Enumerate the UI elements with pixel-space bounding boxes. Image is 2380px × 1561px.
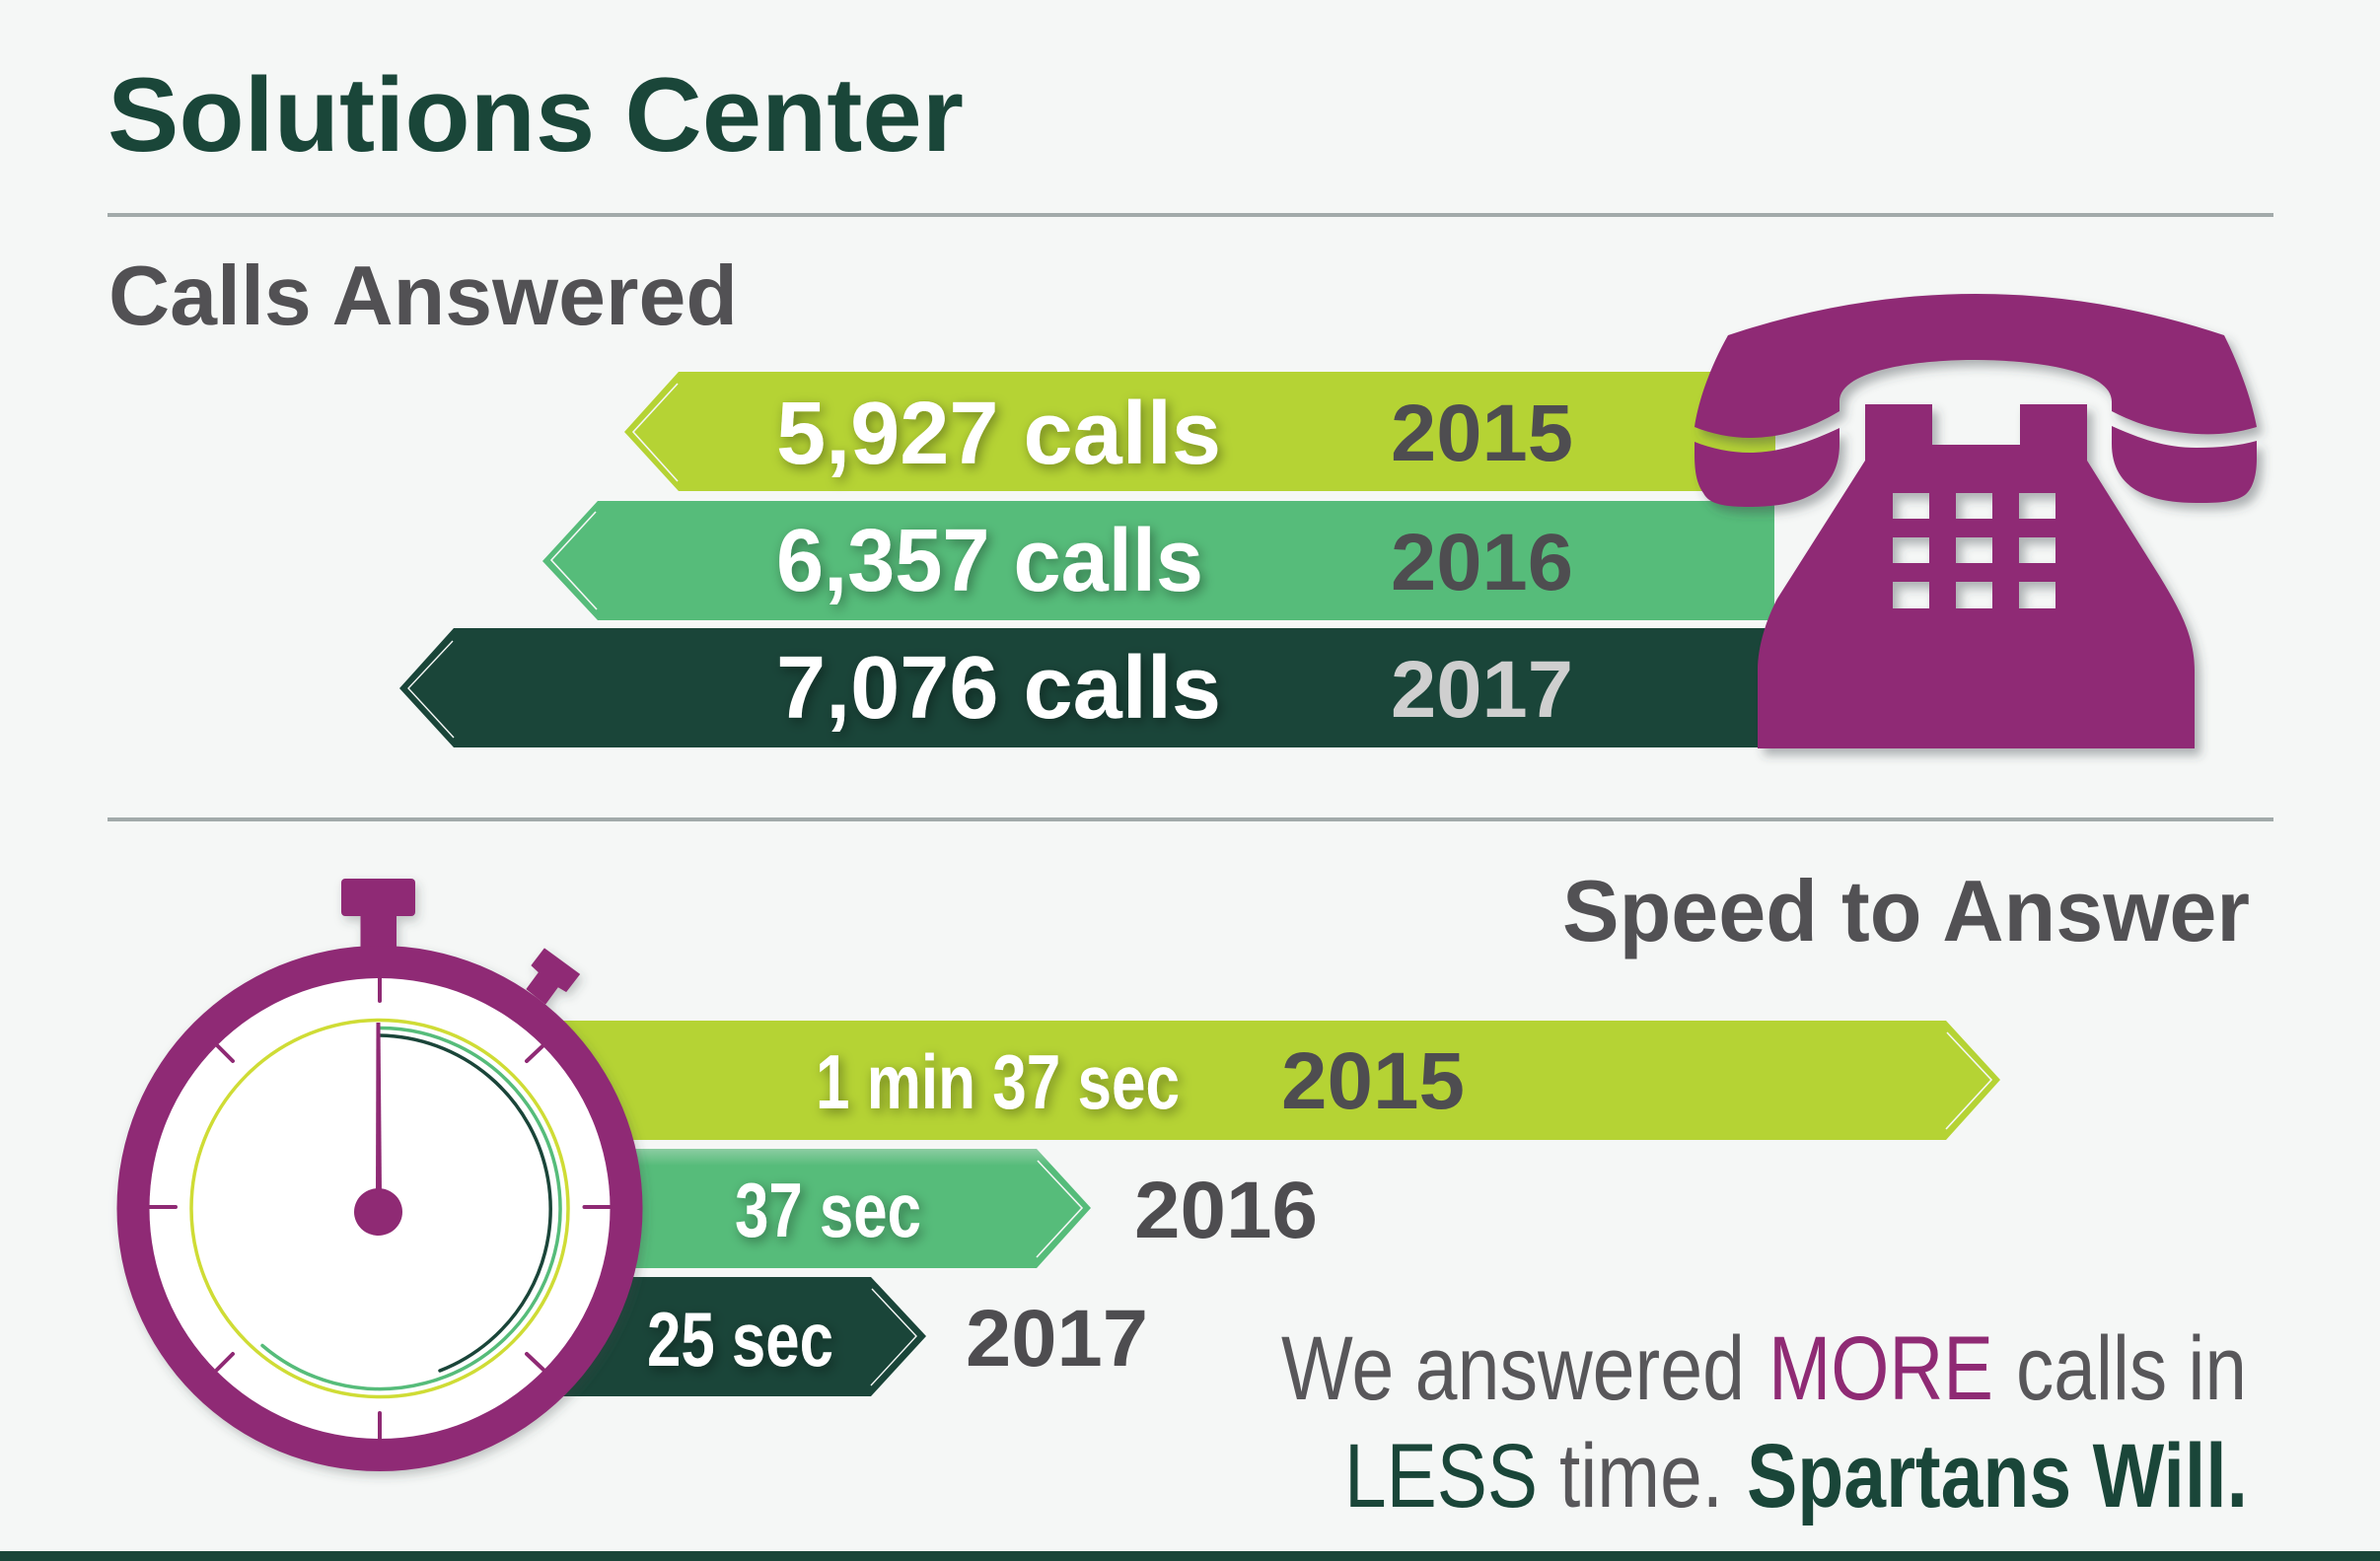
icon: stopwatch <box>116 879 643 1471</box>
bar: 2015 calls: 2015 <box>1391 389 1573 478</box>
closing message <box>1281 1318 2248 1526</box>
closing message: Spartans Will. <box>1747 1426 2248 1526</box>
icon: telephone <box>1695 294 2257 748</box>
bar: 2017 speed <box>552 1277 1148 1396</box>
elapsed time arc: 2016 <box>262 1028 560 1388</box>
bar: 2015 calls: 5,927 calls <box>776 385 1221 483</box>
bar: 2016 speed <box>592 1149 1318 1268</box>
bar: 2016 calls <box>542 501 1774 620</box>
minute ticks <box>149 977 611 1440</box>
heading: speed to answer: Speed to Answer <box>1562 862 2250 959</box>
bar: 2016 calls: 6,357 calls <box>776 512 1203 610</box>
elapsed time arc: 2017 <box>380 1035 550 1371</box>
panel: speed to answer bars <box>493 1021 2000 1396</box>
bar: 2016 speed: 2016 <box>1134 1166 1318 1255</box>
closing message: calls in <box>2016 1318 2247 1419</box>
closing message: LESS <box>1344 1426 1538 1526</box>
bar: 2017 calls <box>399 628 1766 747</box>
bar: 2017 speed: 25 sec <box>647 1296 833 1383</box>
stopwatch hand <box>354 1023 402 1236</box>
closing message: MORE <box>1768 1318 1993 1419</box>
bar: 2015 speed: 2015 <box>1281 1036 1465 1126</box>
bar: 2015 speed <box>493 1021 2000 1140</box>
elapsed time arc: 2015 <box>191 1020 568 1396</box>
stopwatch face <box>150 978 610 1439</box>
closing message: We answered <box>1281 1318 1745 1419</box>
title: Solutions Center <box>108 55 964 174</box>
footer band <box>0 1551 2380 1561</box>
bar: 2017 calls: 7,076 calls <box>776 639 1221 738</box>
stopwatch casing <box>116 879 643 1471</box>
bar: 2016 calls: 2016 <box>1391 518 1573 607</box>
panel: calls answered bars <box>399 372 1775 747</box>
bar: 2015 speed: 1 min 37 sec <box>816 1038 1180 1125</box>
bar: 2016 speed: 37 sec <box>735 1167 921 1253</box>
closing message: time. <box>1559 1426 1723 1526</box>
bar: 2017 calls: 2017 <box>1391 645 1573 735</box>
bar: 2015 calls <box>624 372 1775 491</box>
heading: calls answered: Calls Answered <box>108 249 738 343</box>
bar: 2017 speed: 2017 <box>966 1294 1148 1384</box>
